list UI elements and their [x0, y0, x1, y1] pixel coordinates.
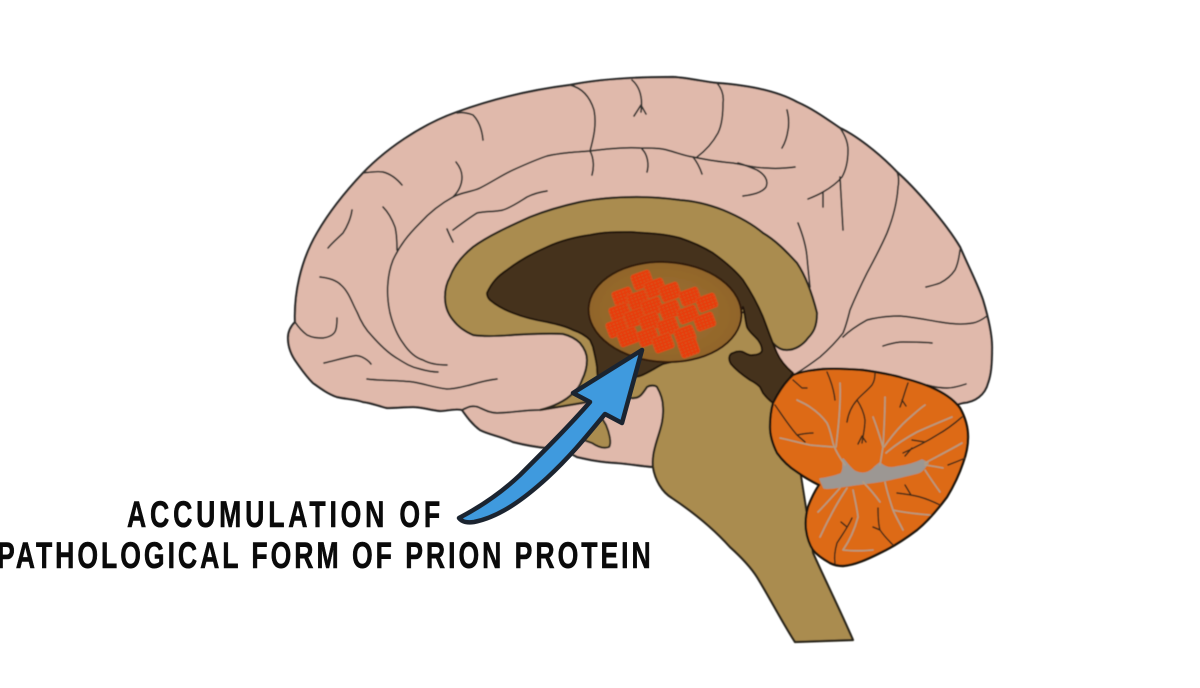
brain illustration: [288, 77, 992, 642]
cerebral sulci: [295, 80, 987, 389]
corpus callosum and fornix: [445, 197, 817, 410]
caption line 2: PATHOLOGICAL FORM OF PRION PROTEIN: [0, 535, 651, 576]
cerebellum: [770, 369, 968, 566]
caption line 1: ACCUMULATION OF: [127, 494, 440, 535]
temporal lobe lower edge: [462, 406, 540, 413]
caption: [0, 494, 651, 576]
ventricle: [487, 232, 793, 403]
pituitary: [578, 415, 610, 448]
blue arrow: [459, 350, 642, 522]
brainstem: [622, 310, 853, 642]
prion protein deposits: [605, 269, 719, 359]
thalamus: [586, 258, 744, 366]
white matter branches: [780, 383, 962, 551]
cerebellar white matter: [820, 459, 928, 488]
cerebrum: [288, 77, 992, 500]
cerebellar folia lines: [775, 372, 965, 563]
